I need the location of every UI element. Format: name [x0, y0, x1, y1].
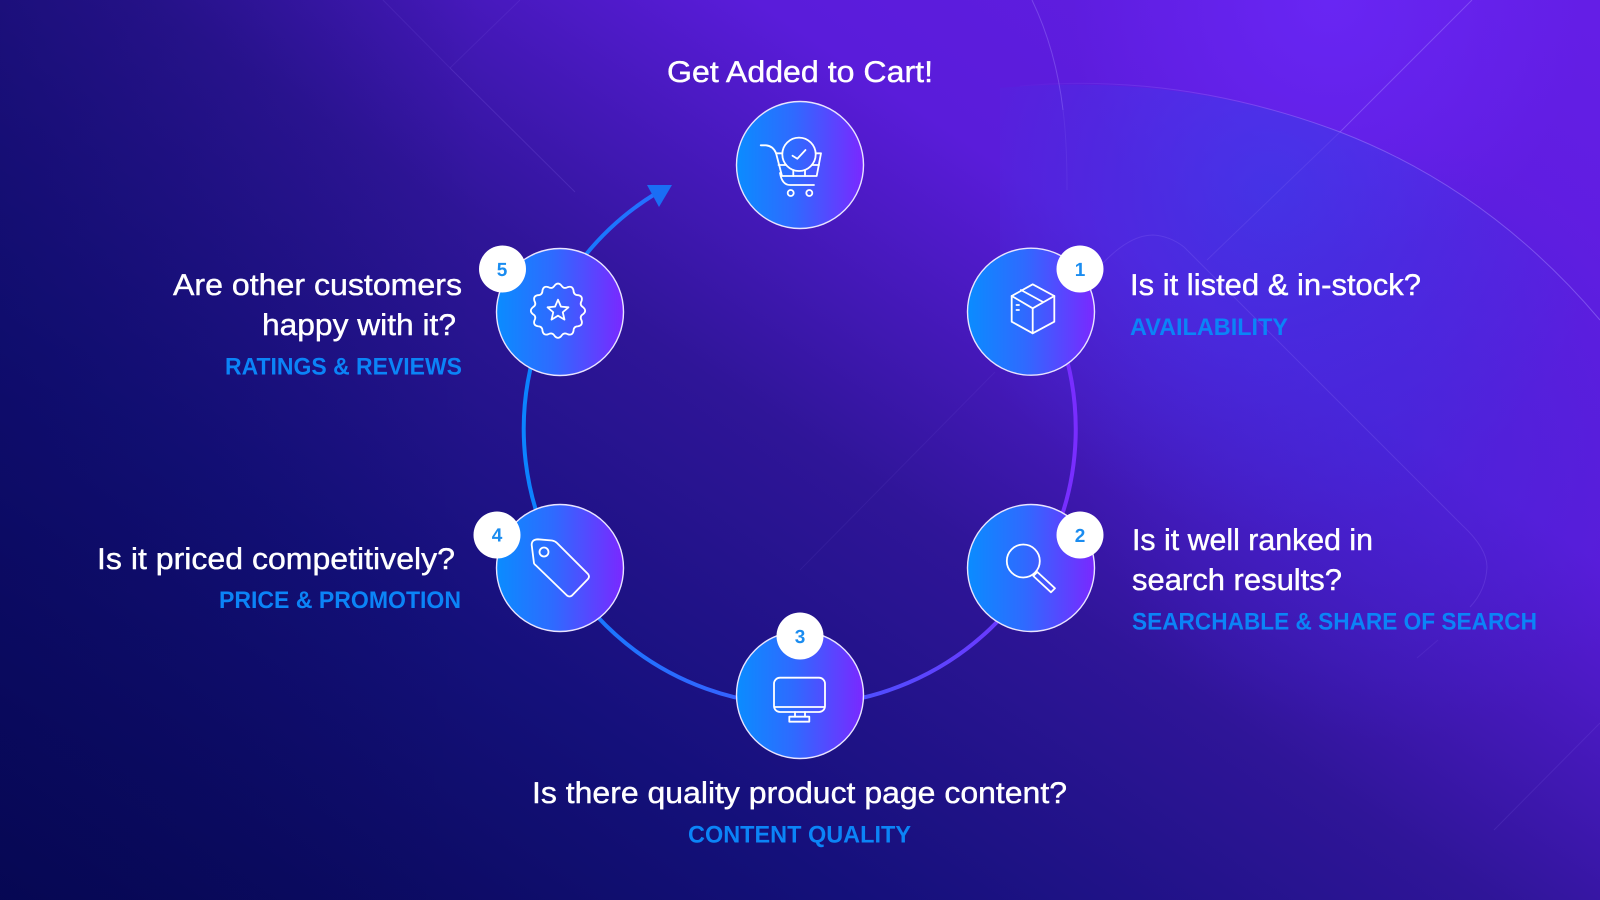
icon: monitor [774, 678, 825, 722]
number badge 3: 3 [795, 627, 805, 648]
question 2: Is it well ranked in [1132, 524, 1373, 557]
number badge 4: 4 [492, 526, 503, 546]
category label: ratings and reviews: RATINGS & REVIEWS [225, 354, 462, 380]
node circle 5 [496, 248, 624, 376]
node circle 1 [968, 248, 1094, 375]
process ring with arrow [524, 185, 1076, 705]
number badge 2 [1056, 512, 1104, 558]
icon: star badge [531, 284, 585, 338]
number badge 4 [474, 512, 520, 558]
arrowhead [647, 185, 672, 207]
category label: content quality: CONTENT QUALITY [688, 822, 911, 848]
number badge 3 [776, 612, 824, 660]
step 4: price [97, 504, 624, 632]
question 4: Is it priced competitively? [97, 543, 455, 576]
question 1: Is it listed & in-stock? [1130, 269, 1421, 302]
question 3: Is there quality product page content? [532, 777, 1067, 810]
number badge 2: 2 [1075, 526, 1085, 547]
question 5: happy with it? [262, 309, 456, 342]
title: get added to cart: Get Added to Cart! [667, 56, 933, 89]
step 3: content [532, 612, 1067, 848]
category label: searchable: SEARCHABLE & SHARE OF SEARCH [1132, 608, 1537, 636]
question 2: search results? [1132, 564, 1342, 597]
node circle 2 [968, 504, 1094, 632]
question 5: Are other customers [173, 269, 462, 302]
number badge 1 [1056, 246, 1104, 292]
category label: availability: AVAILABILITY [1130, 314, 1288, 341]
goal node: cart [736, 102, 864, 228]
icon: price tag [532, 539, 589, 596]
icon: shopping cart [761, 138, 821, 196]
number badge 5 [479, 246, 526, 292]
icon: package box [1012, 284, 1054, 333]
number badge 5: 5 [497, 260, 508, 281]
number badge 1: 1 [1075, 260, 1086, 281]
node circle 3 [736, 632, 864, 758]
node circle 4 [496, 504, 624, 632]
step 1: availability [968, 246, 1421, 375]
icon: magnifier [1007, 544, 1055, 592]
category label: price and promotion: PRICE & PROMOTION [219, 587, 461, 614]
step 5: reviews [173, 246, 624, 380]
step 2: search [968, 504, 1537, 636]
